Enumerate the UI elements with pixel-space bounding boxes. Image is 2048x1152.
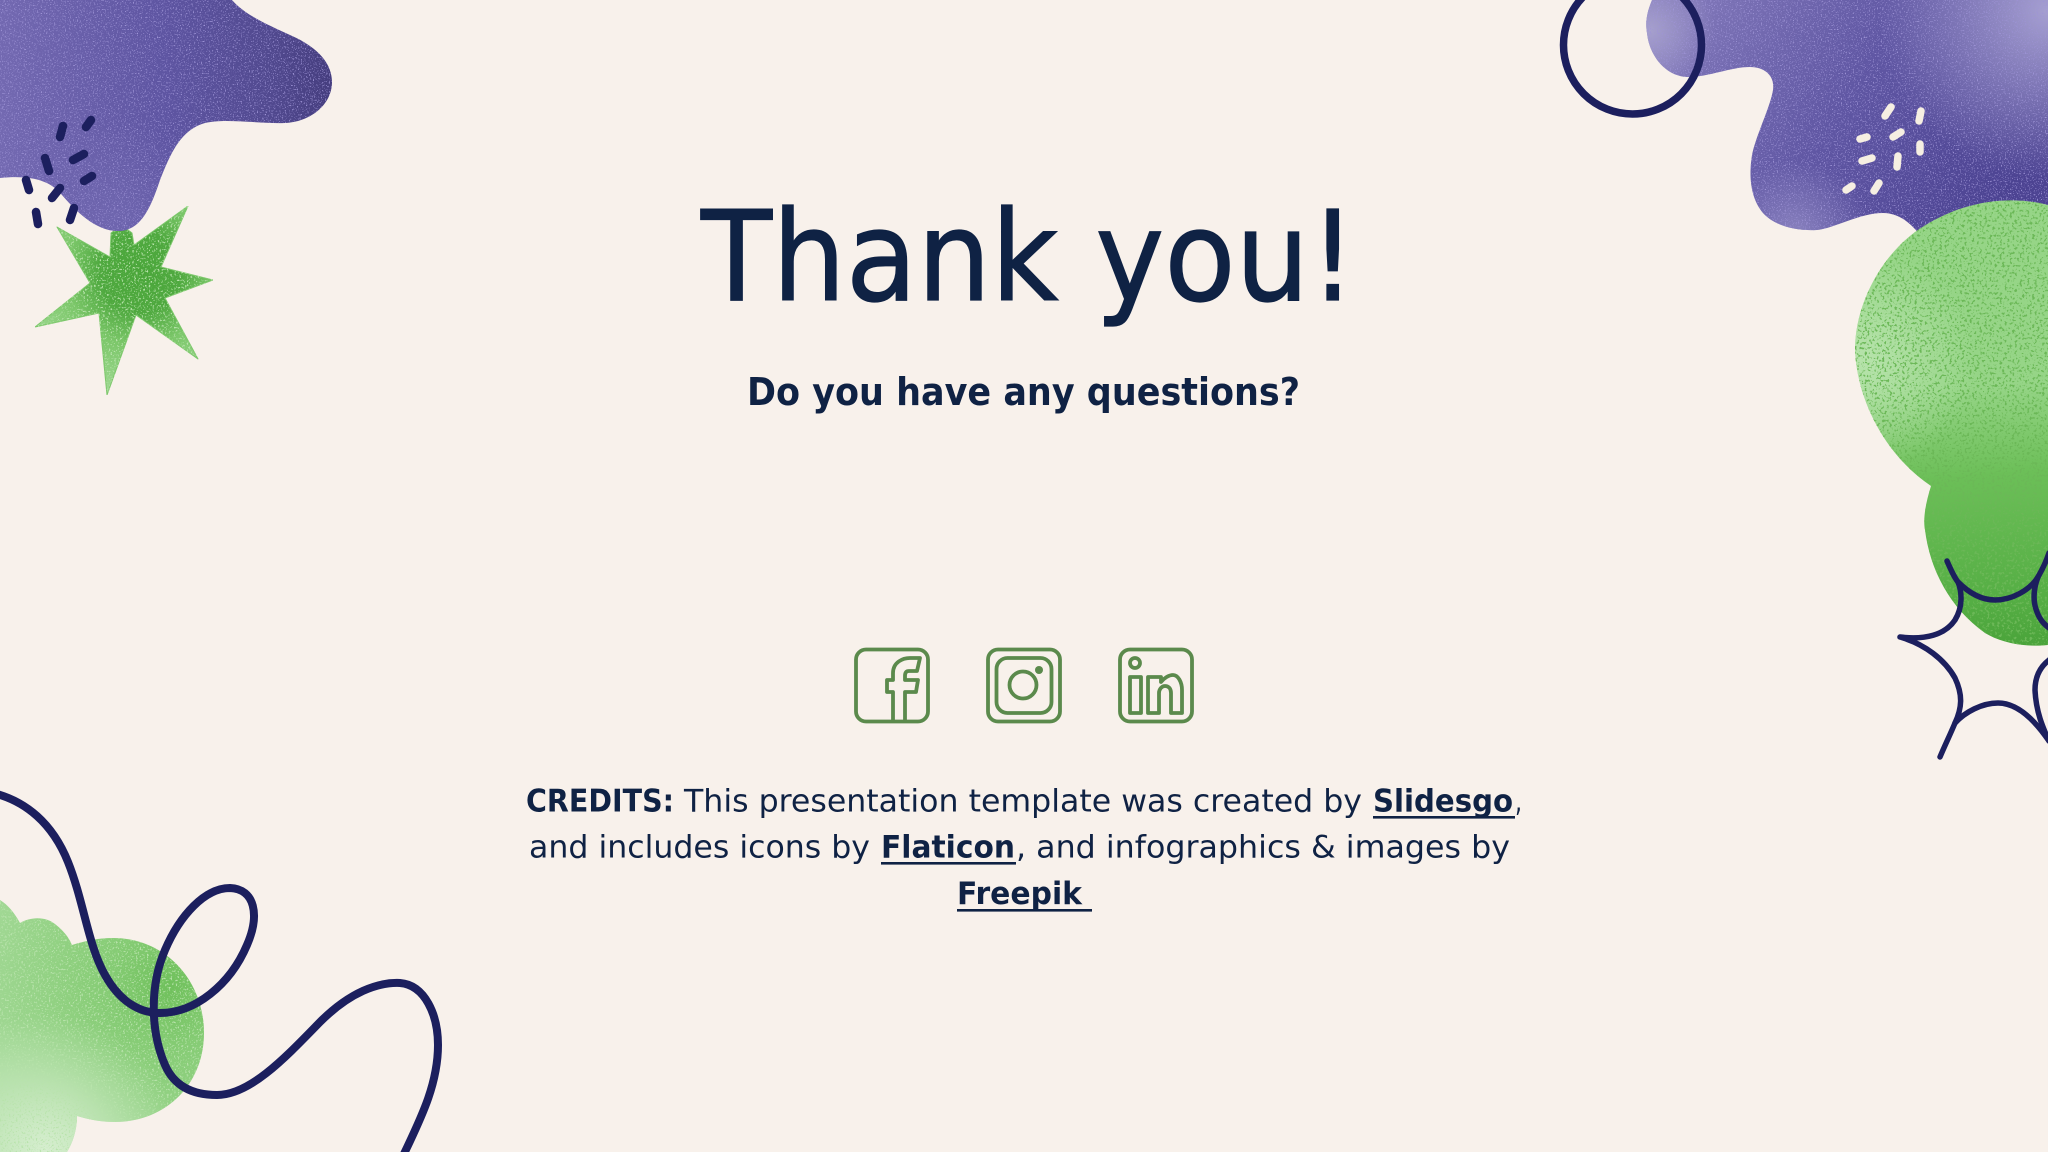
text block: credits: This presentation template was created by bbox=[683, 784, 1362, 820]
shape: navy squiggle line bbox=[0, 794, 438, 1152]
text block: credits: , and infographics & images by bbox=[1016, 830, 1510, 866]
shape: green star bbox=[35, 206, 213, 395]
panel: top-right decoration bbox=[1564, 0, 2048, 757]
shape: purple blob bbox=[0, 0, 332, 231]
icon: instagram bbox=[988, 650, 1060, 722]
icon: cream dashes bbox=[1846, 107, 1921, 191]
text block: credits: Freepik bbox=[957, 876, 1083, 912]
icon: linkedin bbox=[1120, 650, 1192, 722]
text block: credits: and includes icons by bbox=[529, 830, 870, 866]
icons: social media bbox=[856, 650, 1192, 722]
shape: green double circle bbox=[1855, 200, 2048, 646]
text block: credits: , bbox=[1515, 784, 1522, 820]
icon: navy dashes bbox=[26, 120, 92, 224]
subtitle: Do you have any questions? bbox=[747, 370, 1300, 414]
text block: credits: Slidesgo bbox=[1373, 784, 1513, 820]
icon: facebook bbox=[856, 650, 928, 722]
shape: purple wave blob bbox=[1646, 0, 2048, 231]
panel: bottom-left decoration bbox=[0, 794, 438, 1152]
title: Thank you! bbox=[700, 185, 1356, 330]
text block: credits: Flaticon bbox=[881, 830, 1015, 866]
text block: credits: CREDITS: bbox=[526, 784, 674, 820]
shape: navy outline star bbox=[1900, 553, 2048, 757]
shape: navy ring bbox=[1564, 0, 1702, 114]
shape: green cloud bbox=[0, 900, 204, 1152]
text block: credits bbox=[526, 784, 1522, 912]
panel: top-left decoration bbox=[0, 0, 332, 395]
